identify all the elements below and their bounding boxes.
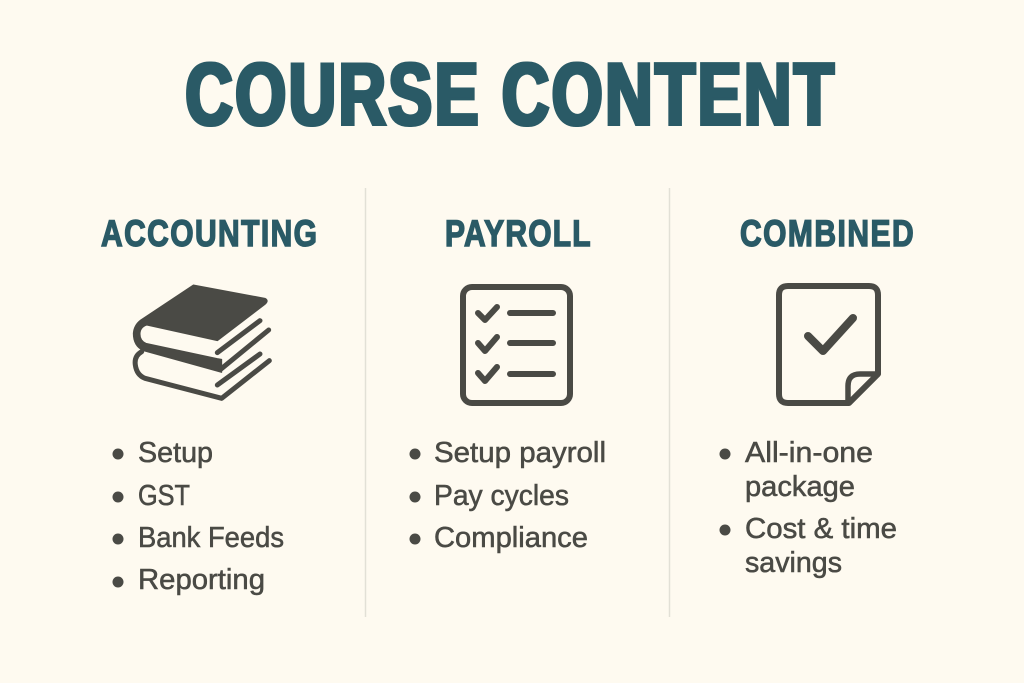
title: COURSE CONTENT — [186, 46, 834, 144]
list: accounting topics: Bank Feeds — [138, 522, 284, 554]
heading: combined: COMBINED — [740, 213, 914, 255]
heading: payroll: PAYROLL — [445, 213, 591, 255]
list: payroll topics: Pay cycles — [434, 480, 569, 512]
icon: stacked books — [133, 285, 269, 398]
list: accounting topics: Reporting — [138, 564, 265, 596]
list: combined topics — [720, 437, 897, 579]
panel: accounting — [101, 213, 317, 596]
list: accounting topics: GST — [138, 480, 190, 512]
list: combined topics: Cost & time — [745, 513, 897, 545]
heading: accounting: ACCOUNTING — [101, 213, 317, 255]
list: payroll topics: Compliance — [434, 522, 588, 554]
list: payroll topics: Setup payroll — [434, 437, 606, 469]
list: accounting topics — [112, 437, 284, 596]
panel: combined — [720, 213, 914, 579]
panel: payroll — [410, 213, 606, 554]
icon: checklist — [463, 287, 570, 403]
list: combined topics: All-in-one — [745, 437, 873, 469]
icon: document with check — [779, 286, 878, 403]
list: combined topics: package — [745, 471, 855, 503]
list: accounting topics: Setup — [138, 437, 213, 469]
list: combined topics: savings — [745, 547, 842, 579]
list: payroll topics — [410, 437, 606, 554]
